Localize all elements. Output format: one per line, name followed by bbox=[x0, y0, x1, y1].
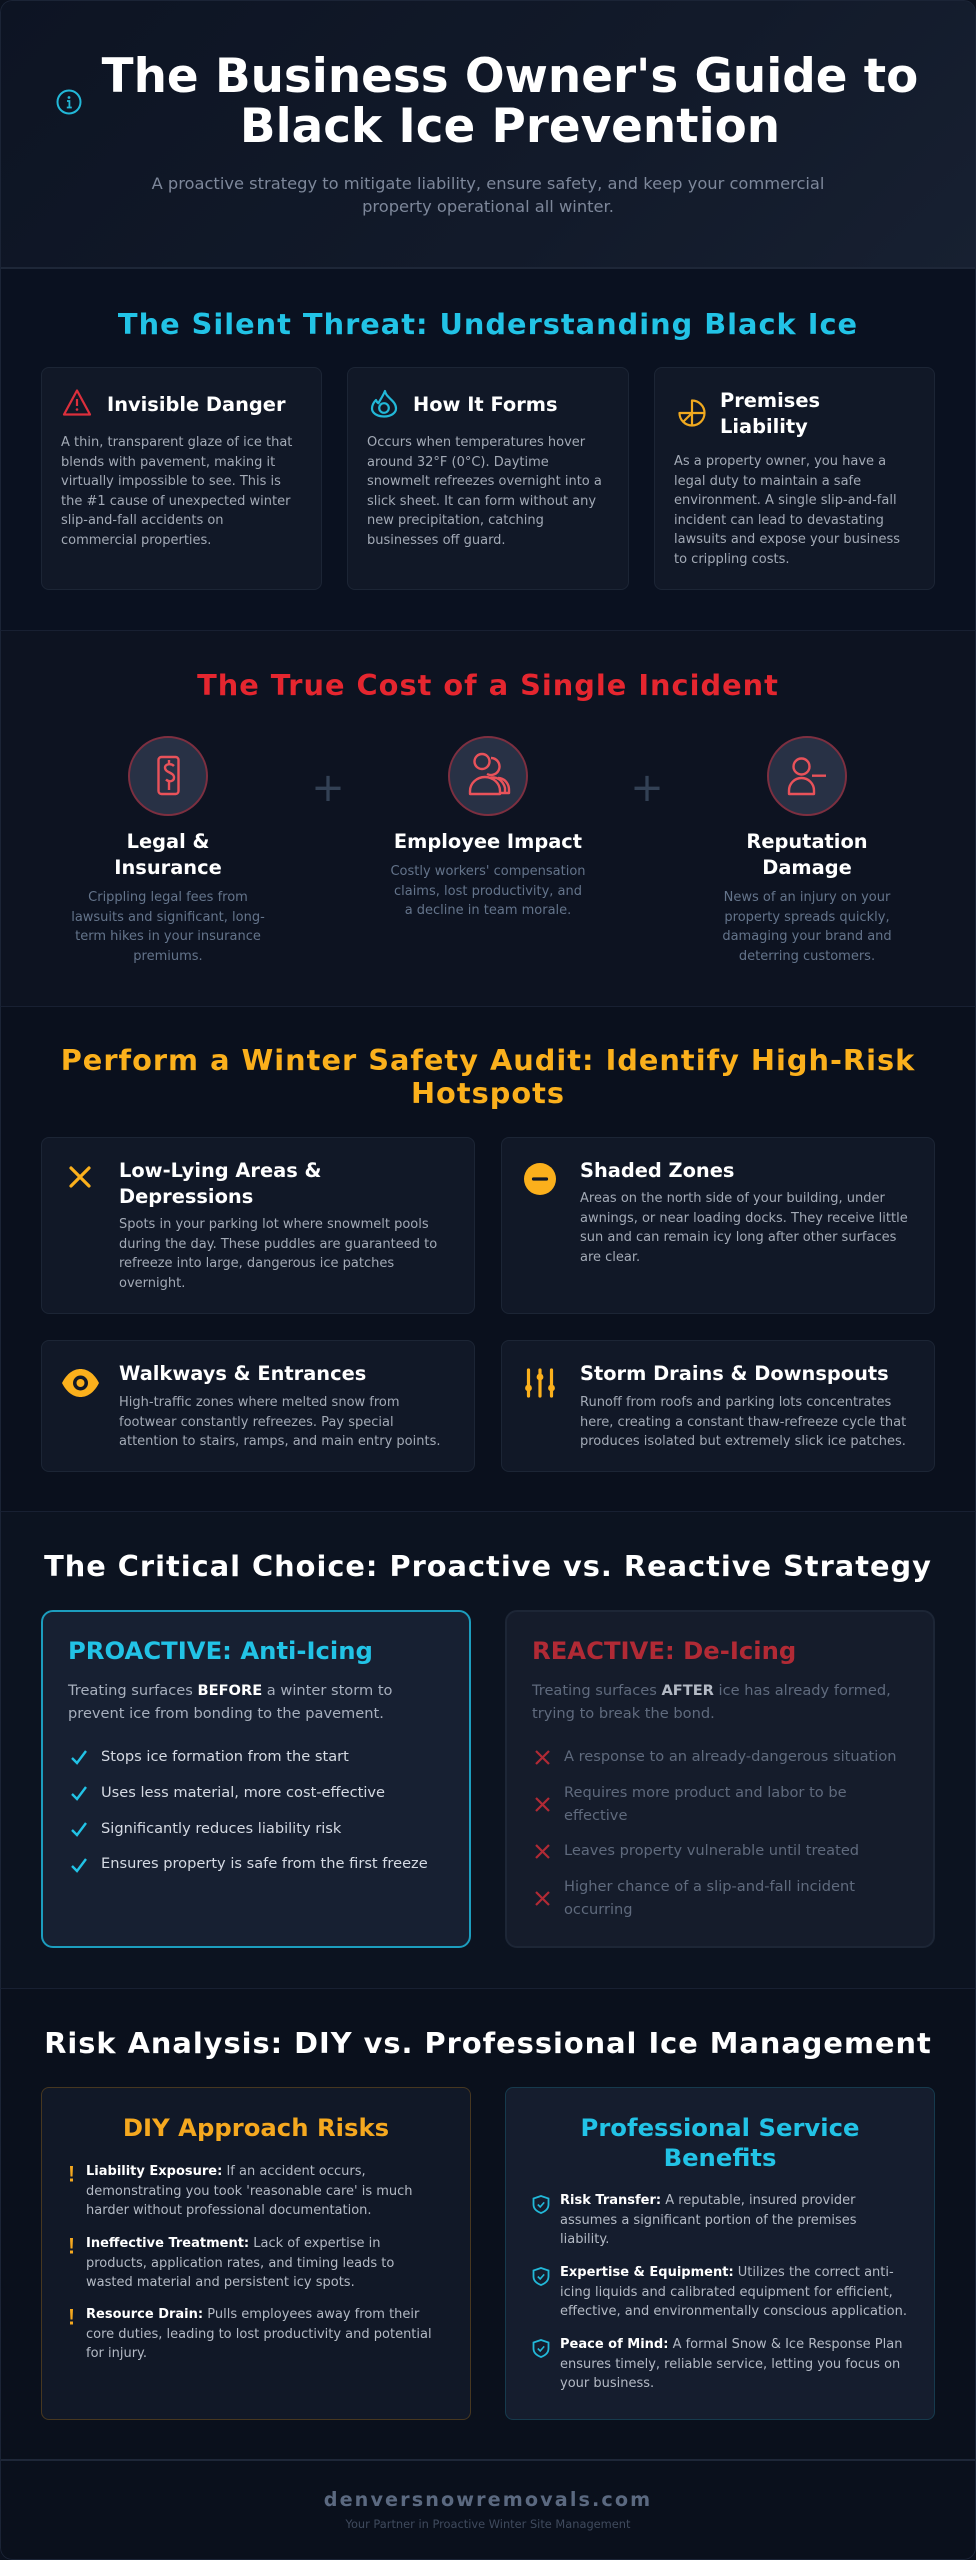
card text: are clear. bbox=[580, 1250, 640, 1264]
card: proactive bbox=[41, 1610, 471, 1948]
card title: Depressions bbox=[119, 1185, 253, 1208]
column title: reputation: Reputation bbox=[746, 830, 868, 853]
icon: cross bbox=[535, 1891, 550, 1906]
risk 1 bbox=[86, 2164, 413, 2218]
card text: attention to stairs, ramps, and main entry points. bbox=[119, 1434, 440, 1449]
card text bbox=[119, 1217, 437, 1290]
card: how it forms bbox=[347, 367, 629, 590]
column text: employee: claims, lost productivity, and bbox=[394, 884, 582, 898]
card: professional benefits bbox=[505, 2087, 935, 2420]
column title: legal bbox=[114, 830, 222, 879]
check item 3: Significantly reduces liability risk bbox=[101, 1820, 341, 1837]
card title: Professional Service bbox=[581, 2113, 859, 2142]
cross item 2 bbox=[564, 1784, 847, 1824]
card text bbox=[61, 435, 292, 548]
benefit 2: effective, and environmentally conscious application. bbox=[560, 2304, 907, 2319]
plus sign: + bbox=[630, 765, 664, 811]
column title: legal: Insurance bbox=[114, 856, 222, 879]
icon: reputation damage bbox=[767, 736, 847, 816]
card text: Runoff from roofs and parking lots concentrates bbox=[580, 1395, 891, 1410]
card text bbox=[68, 1682, 392, 1722]
heading bbox=[61, 1043, 915, 1110]
card text: the #1 cause of unexpected winter bbox=[61, 494, 290, 508]
icon: exclamation bbox=[69, 2238, 74, 2254]
card text: here, creating a constant thaw-refreeze cycle that bbox=[580, 1414, 906, 1430]
card text: sun and can remain icy long after other surfaces bbox=[580, 1230, 896, 1245]
card text: footwear constantly refreezes. Pay special bbox=[119, 1414, 394, 1430]
icon: info circle bbox=[56, 90, 82, 114]
card text: overnight. bbox=[119, 1276, 185, 1290]
card text bbox=[532, 1682, 891, 1722]
column title: reputation bbox=[746, 830, 868, 879]
column title: employee: Employee Impact bbox=[394, 830, 582, 853]
subtitle bbox=[152, 174, 824, 216]
risk 1: harder without professional documentation. bbox=[86, 2203, 372, 2218]
heading: The Silent Threat: Understanding Black Ice bbox=[118, 307, 858, 341]
card text: snowmelt refreezes overnight into a bbox=[367, 474, 602, 489]
risk 1: demonstrating you took 'reasonable care' is much bbox=[86, 2184, 413, 2198]
icon: cross bbox=[535, 1844, 550, 1859]
column text: reputation: deterring customers. bbox=[739, 948, 875, 964]
column text: reputation: News of an injury on your bbox=[724, 890, 890, 905]
benefit 3: ensures timely, reliable service, letting you focus on bbox=[560, 2356, 900, 2372]
heading: The Critical Choice: Proactive vs. Reactive Strategy bbox=[44, 1549, 932, 1583]
card text bbox=[674, 454, 900, 566]
column text: reputation bbox=[722, 890, 892, 964]
column text: legal bbox=[71, 890, 265, 964]
card text: Treating surfaces AFTER ice has already formed, bbox=[532, 1682, 891, 1699]
heading: The True Cost of a Single Incident bbox=[197, 668, 779, 702]
icon: cross bbox=[535, 1797, 550, 1812]
card: storm drains bbox=[501, 1340, 935, 1472]
header bbox=[0, 0, 976, 269]
card text: environment. A single slip-and-fall bbox=[674, 493, 897, 508]
card: reactive bbox=[505, 1610, 935, 1948]
icon: check bbox=[71, 1786, 87, 1801]
footer tagline: Your Partner in Proactive Winter Site Management bbox=[346, 2517, 630, 2531]
icon: exclamation bbox=[69, 2309, 74, 2325]
card text: High-traffic zones where melted snow from bbox=[119, 1395, 400, 1410]
title: Black Ice Prevention bbox=[240, 100, 780, 154]
card text: legal duty to maintain a safe bbox=[674, 474, 861, 488]
heading: Risk Analysis: DIY vs. Professional Ice Management bbox=[44, 2026, 932, 2060]
card text: around 32°F (0°C). Daytime bbox=[367, 454, 549, 470]
card title: REACTIVE: De-Icing bbox=[532, 1636, 796, 1665]
column text: legal: Crippling legal fees from bbox=[88, 890, 248, 905]
card text: slip-and-fall accidents on bbox=[61, 513, 224, 528]
card title: Premises bbox=[720, 389, 820, 412]
card title bbox=[506, 2113, 934, 2172]
icon: check bbox=[71, 1822, 87, 1837]
card text: virtually impossible to see. This is bbox=[61, 474, 281, 489]
benefit 2 bbox=[560, 2263, 907, 2322]
cross item 4: Higher chance of a slip-and-fall incident bbox=[564, 1878, 855, 1895]
card: premises liability bbox=[654, 367, 935, 590]
card text: refreeze into large, dangerous ice patches bbox=[119, 1256, 394, 1271]
section: risk analysis bbox=[0, 1989, 976, 2461]
icon: sliders bbox=[525, 1368, 555, 1398]
benefit 2: Expertise & Equipment: Utilizes the correct anti- bbox=[560, 2265, 894, 2280]
card title: How It Forms bbox=[413, 393, 558, 416]
risk 2: wasted material and persistent icy spots. bbox=[86, 2275, 355, 2290]
icon: check bbox=[71, 1750, 87, 1765]
card text: Treating surfaces BEFORE a winter storm to bbox=[68, 1682, 392, 1699]
heading: Hotspots bbox=[411, 1076, 565, 1110]
card text: new precipitation, catching bbox=[367, 513, 544, 528]
icon: shield bbox=[532, 2195, 550, 2214]
icon: exclamation bbox=[69, 2166, 74, 2182]
risk 2: Ineffective Treatment: Lack of expertise in bbox=[86, 2236, 380, 2251]
icon: shield bbox=[532, 2267, 550, 2286]
card text bbox=[119, 1395, 440, 1449]
card title: Benefits bbox=[664, 2142, 776, 2172]
cross item 1: A response to an already-dangerous situation bbox=[564, 1748, 896, 1765]
card title: Invisible Danger bbox=[107, 393, 286, 416]
check item 4: Ensures property is safe from the first freeze bbox=[101, 1855, 428, 1872]
benefit 2: icing liquids and calibrated equipment for efficient, bbox=[560, 2284, 893, 2300]
card text: Occurs when temperatures hover bbox=[367, 435, 585, 450]
column title: reputation: Damage bbox=[762, 856, 852, 879]
risk 1: Liability Exposure: If an accident occurs, bbox=[86, 2164, 366, 2179]
risk 2: products, application rates, and timing leads to bbox=[86, 2256, 394, 2270]
card text: incident can lead to devastating bbox=[674, 512, 884, 528]
card title: Walkways & Entrances bbox=[119, 1362, 366, 1385]
card text: awnings, or near loading docks. They receive little bbox=[580, 1210, 908, 1226]
benefit 1: assumes a significant portion of the premises bbox=[560, 2212, 857, 2228]
card title: Storm Drains & Downspouts bbox=[580, 1362, 889, 1385]
risk 2 bbox=[86, 2234, 394, 2292]
icon: legal and insurance bbox=[128, 736, 208, 816]
card title: Low-Lying Areas & bbox=[119, 1159, 321, 1182]
icon: flame ring bbox=[370, 390, 398, 418]
risk 3: core duties, leading to lost productivity and potential bbox=[86, 2326, 432, 2342]
footer bbox=[0, 2461, 976, 2560]
column title: legal: Legal & bbox=[127, 830, 209, 853]
benefit 1 bbox=[560, 2191, 857, 2250]
cross item 3: Leaves property vulnerable until treated bbox=[564, 1842, 859, 1859]
card: shaded zones bbox=[501, 1137, 935, 1314]
risk 3: Resource Drain: Pulls employees away from their bbox=[86, 2307, 419, 2322]
card title bbox=[119, 1159, 321, 1208]
title bbox=[102, 50, 918, 154]
icon: check bbox=[71, 1858, 87, 1873]
card title: PROACTIVE: Anti-Icing bbox=[68, 1636, 373, 1665]
subtitle: property operational all winter. bbox=[362, 197, 614, 216]
check item 1: Stops ice formation from the start bbox=[101, 1748, 349, 1765]
card text: Areas on the north side of your building, under bbox=[580, 1191, 885, 1206]
cross item 4 bbox=[564, 1878, 855, 1918]
card: walkways bbox=[41, 1340, 475, 1472]
card text: As a property owner, you have a bbox=[674, 454, 886, 469]
column text: legal: lawsuits and significant, long- bbox=[71, 910, 265, 924]
card: invisible danger bbox=[41, 367, 322, 590]
column text: legal: premiums. bbox=[133, 948, 203, 964]
column text: reputation: property spreads quickly, bbox=[724, 910, 890, 924]
cross item 2: Requires more product and labor to be bbox=[564, 1784, 847, 1801]
icon: sectioned pie bbox=[678, 399, 706, 427]
risk 3 bbox=[86, 2305, 432, 2364]
card text: prevent ice from bonding to the pavement. bbox=[68, 1705, 384, 1722]
card text: to crippling costs. bbox=[674, 552, 790, 566]
benefit 3: your business. bbox=[560, 2376, 654, 2391]
column text: employee: Costly workers' compensation bbox=[390, 864, 586, 879]
section: proactive vs reactive bbox=[0, 1512, 976, 1989]
cross item 2: effective bbox=[564, 1807, 627, 1824]
icon: eye bbox=[62, 1369, 99, 1397]
title: The Business Owner's Guide to bbox=[102, 50, 918, 104]
card text: blends with pavement, making it bbox=[61, 454, 275, 470]
card text: produces isolated but extremely slick ice patches. bbox=[580, 1434, 906, 1449]
card text bbox=[367, 435, 602, 548]
card text: trying to break the bond. bbox=[532, 1705, 715, 1722]
section: safety audit bbox=[0, 1007, 976, 1512]
card text: businesses off guard. bbox=[367, 532, 506, 548]
icon: employee impact bbox=[448, 736, 528, 816]
cross item 4: occurring bbox=[564, 1901, 633, 1918]
column text: employee bbox=[390, 864, 586, 918]
card text bbox=[580, 1395, 906, 1449]
footer site name: denversnowremovals.com bbox=[324, 2488, 652, 2511]
card title bbox=[720, 389, 820, 438]
icon: minus circle bbox=[524, 1163, 556, 1195]
card text bbox=[580, 1191, 908, 1264]
card text: Spots in your parking lot where snowmelt pools bbox=[119, 1217, 429, 1232]
subtitle: A proactive strategy to mitigate liability, ensure safety, and keep your commercial bbox=[152, 174, 824, 193]
card text: during the day. These puddles are guaranteed to bbox=[119, 1236, 437, 1252]
risk 3: for injury. bbox=[86, 2346, 147, 2361]
card text: A thin, transparent glaze of ice that bbox=[61, 435, 292, 450]
benefit 3 bbox=[560, 2335, 902, 2394]
card text: lawsuits and expose your business bbox=[674, 532, 900, 547]
benefit 1: Risk Transfer: A reputable, insured provider bbox=[560, 2193, 855, 2208]
card: DIY risks bbox=[41, 2087, 471, 2420]
icon: warning triangle bbox=[62, 389, 92, 416]
cross list bbox=[535, 1748, 896, 1918]
heading: Perform a Winter Safety Audit: Identify High-Risk bbox=[61, 1043, 915, 1077]
card title: Liability bbox=[720, 415, 808, 438]
benefit 1: liability. bbox=[560, 2232, 609, 2247]
icon: cross bbox=[69, 1166, 91, 1188]
card text: slick sheet. It can form without any bbox=[367, 494, 596, 508]
card title: Shaded Zones bbox=[580, 1159, 734, 1182]
check list bbox=[71, 1748, 428, 1873]
benefit 3: Peace of Mind: A formal Snow & Ice Response Plan bbox=[560, 2337, 902, 2352]
card: low-lying areas bbox=[41, 1137, 475, 1314]
column text: legal: term hikes in your insurance bbox=[75, 929, 261, 944]
section: the silent threat bbox=[0, 269, 976, 631]
plus sign: + bbox=[311, 765, 345, 811]
card text: commercial properties. bbox=[61, 532, 211, 548]
icon: cross bbox=[535, 1750, 550, 1765]
icon: shield bbox=[532, 2339, 550, 2358]
column text: employee: a decline in team morale. bbox=[405, 903, 571, 918]
card title: DIY Approach Risks bbox=[123, 2113, 389, 2142]
section: true cost bbox=[0, 631, 976, 1007]
check item 2: Uses less material, more cost-effective bbox=[101, 1784, 385, 1801]
column text: reputation: damaging your brand and bbox=[722, 929, 892, 944]
